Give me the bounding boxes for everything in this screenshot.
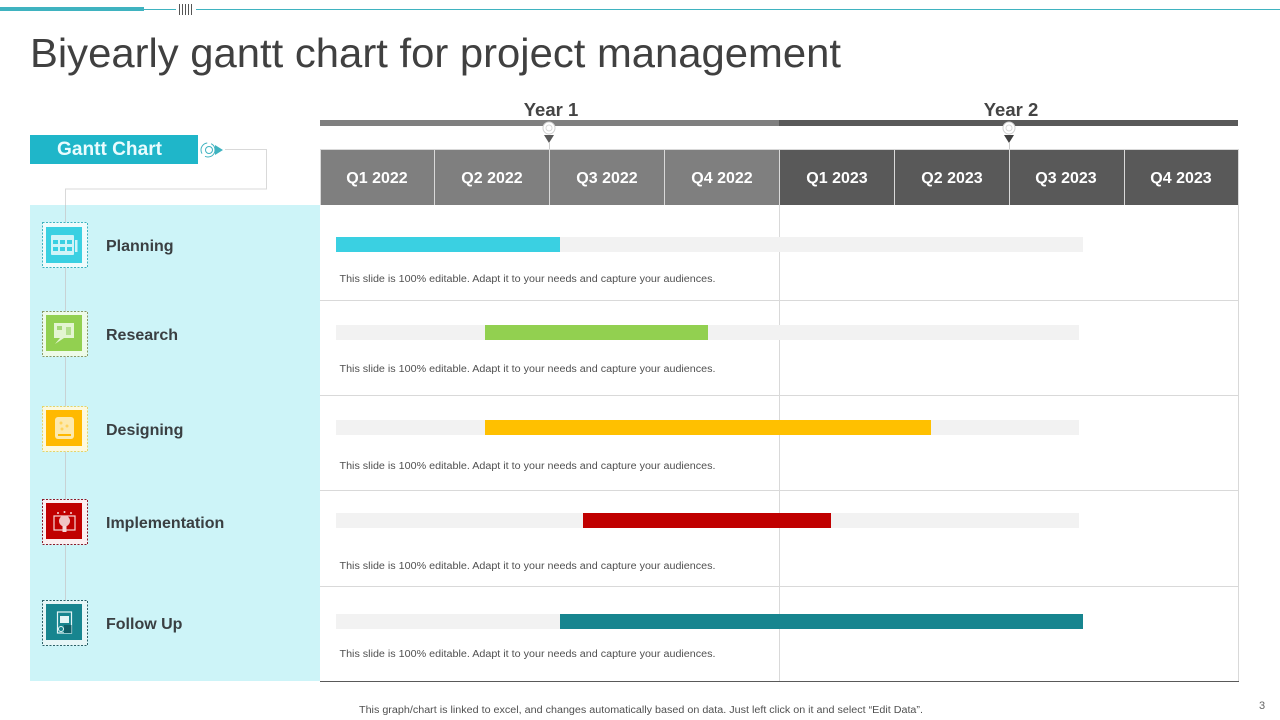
- label: Follow Up: [106, 616, 183, 633]
- title: Biyearly gantt chart for project management: [30, 30, 842, 76]
- task: follow up: [42, 600, 183, 646]
- gantt chart tag: Gantt Chart: [57, 139, 163, 160]
- progress bar: [583, 513, 831, 528]
- note: This slide is 100% editable. Adapt it to your needs and capture your audiences.: [340, 364, 716, 375]
- label: Planning: [106, 238, 174, 255]
- note: This slide is 100% editable. Adapt it to your needs and capture your audiences.: [340, 461, 716, 472]
- icon: monitor with gear: [42, 500, 88, 544]
- progress bar: [560, 614, 1083, 629]
- quarter header row: Q3 2022: [576, 170, 638, 187]
- label: Implementation: [106, 515, 224, 532]
- quarter header row: Q2 2022: [461, 170, 523, 187]
- row 5: follow up bar: [336, 614, 1083, 660]
- connector from tag to task panel: [66, 143, 266, 205]
- quarter header row: Q1 2022: [346, 170, 408, 187]
- quarter header row: Q2 2023: [921, 170, 983, 187]
- row 2: research bar: [336, 325, 1079, 375]
- row 4: implementation bar: [336, 513, 1079, 572]
- chart grid: [320, 205, 1239, 681]
- note: This slide is 100% editable. Adapt it to your needs and capture your audiences.: [340, 274, 716, 285]
- gantt chart tag: [30, 135, 198, 164]
- progress bar: [336, 237, 560, 252]
- year 1 marker: [543, 122, 555, 149]
- track: [336, 237, 1083, 252]
- task: planning: [42, 222, 174, 268]
- row 1: planning bar: [336, 237, 1083, 285]
- track: [336, 420, 1079, 435]
- icon: calendar: [42, 222, 88, 268]
- left task panel: [30, 205, 320, 681]
- note: This slide is 100% editable. Adapt it to your needs and capture your audiences.: [340, 561, 716, 572]
- icon: presentation: [42, 312, 88, 356]
- icon: contact tablet: [42, 600, 88, 646]
- note: This slide is 100% editable. Adapt it to your needs and capture your audiences.: [340, 649, 716, 660]
- track: [336, 513, 1079, 528]
- track: [336, 614, 1083, 629]
- quarter header row: Q4 2023: [1150, 170, 1212, 187]
- quarter header row: [320, 149, 1239, 205]
- year 2 marker: [1003, 122, 1015, 149]
- label: Research: [106, 327, 178, 344]
- progress bar: [485, 325, 708, 340]
- year 1 bar: [320, 120, 779, 126]
- quarter header row: Q1 2023: [806, 170, 868, 187]
- page number: 3: [1259, 700, 1265, 712]
- footnote: This graph/chart is linked to excel, and changes automatically based on data. Just left click on it and select “Edit Data”.: [359, 705, 923, 716]
- year headers: [320, 99, 1238, 149]
- year 2 bar: [779, 120, 1238, 126]
- task: designing: [42, 406, 183, 452]
- icon: document: [42, 406, 88, 452]
- top decorative rule: [0, 4, 1280, 15]
- quarter header row: Q4 2022: [691, 170, 753, 187]
- label: Designing: [106, 422, 183, 439]
- track: [336, 325, 1079, 340]
- task panel connector line: [65, 205, 66, 625]
- task: implementation: [42, 500, 224, 544]
- year 2 label: Year 2: [984, 99, 1038, 120]
- year 1 label: Year 1: [524, 99, 578, 120]
- row 3: designing bar: [336, 420, 1079, 472]
- progress bar: [485, 420, 931, 435]
- quarter header row: Q3 2023: [1035, 170, 1097, 187]
- task: research: [42, 312, 178, 356]
